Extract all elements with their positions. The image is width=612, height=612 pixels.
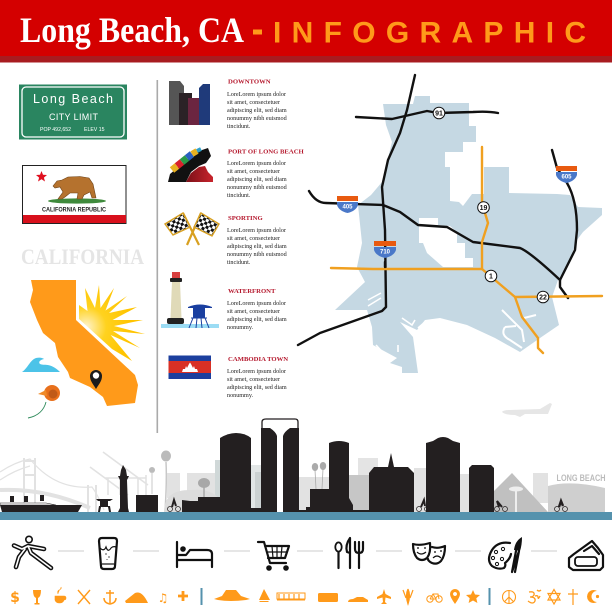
California flag [22, 166, 126, 224]
green city limit sign: ELEV 15 [84, 127, 105, 133]
text: sporting: nonummy nibh euismod [227, 252, 287, 258]
text: downtown: sit amet, consectetuer [227, 100, 280, 106]
green city limit sign [19, 84, 127, 140]
icon: map pin [450, 589, 460, 604]
row of small orange icons [10, 587, 599, 606]
icon: checkered flags [165, 213, 219, 245]
poppy flower [28, 385, 60, 418]
Long Beach road map [298, 75, 602, 373]
icon: bus [318, 593, 338, 602]
flag caption: CALIFORNIA REPUBLIC [42, 206, 106, 214]
text: sporting: adipiscing elit, sed diam [227, 244, 287, 250]
bar [200, 588, 202, 605]
sun [79, 285, 145, 361]
shield: 1: 1 [489, 274, 493, 280]
icon: om [528, 590, 541, 603]
shield: 22 [537, 291, 549, 303]
text: downtown: tincidunt. [227, 124, 251, 130]
heading: port: PORT OF LONG BEACH [228, 148, 305, 156]
white cut-outs in land [368, 218, 536, 357]
airplane [502, 403, 552, 417]
icon: runner [14, 536, 51, 568]
shield: interstate 605: 605 [561, 174, 572, 180]
location pin [90, 370, 102, 389]
heading: sporting: SPORTING [228, 215, 263, 222]
skyline [0, 419, 612, 520]
bar [488, 588, 490, 605]
text: Cambodia town: adipiscing elit, sed diam [227, 385, 287, 391]
icon: lighthouse and lifeguard tower [161, 272, 219, 328]
text: port: adipiscing elit, sed diam [227, 177, 287, 183]
vertical divider [156, 80, 158, 433]
road: route 1 [331, 268, 543, 353]
heading: Cambodia town: CAMBODIA TOWN [228, 356, 288, 363]
icon: container ship [168, 148, 213, 182]
icon: bicycle [427, 594, 442, 602]
text: waterfront: nonummy. [227, 325, 254, 331]
text: port: sit amet, consectetuer [227, 169, 280, 175]
icon: sailboat [259, 589, 270, 602]
flag bear [53, 176, 96, 199]
state shape [30, 280, 138, 406]
shield: 22: 22 [539, 294, 547, 302]
text: Cambodia town: sit amet, consectetuer [227, 377, 280, 383]
icon: bed [177, 542, 212, 567]
icon: cutlery [335, 538, 363, 568]
icon: peace [502, 590, 516, 604]
icon: beer glass [99, 538, 117, 569]
icon: music: ♫ [158, 591, 168, 605]
road: 91 freeway [356, 111, 498, 119]
background skyline gray [0, 450, 606, 512]
icon: car [348, 597, 368, 602]
separators [58, 550, 557, 552]
text: sporting: sit amet, consectetuer [227, 236, 280, 242]
text: port: LoreLorem ipsum dolor [227, 161, 286, 167]
text: waterfront: sit amet, consectetuer [227, 309, 280, 315]
icon: Cambodian flag [168, 356, 211, 379]
icon: cross [568, 589, 578, 605]
subtitle: INFOGRAPHIC [273, 16, 586, 50]
flag grass [48, 198, 106, 204]
heading: downtown: DOWNTOWN [228, 78, 271, 86]
port section [168, 148, 305, 199]
icon: anchor [104, 590, 116, 604]
shield: 19 [478, 202, 489, 213]
text: port: nonummy nibh euismod [227, 185, 287, 191]
road: 405 freeway [309, 191, 560, 280]
green city limit sign: POP 492,652 [40, 127, 71, 133]
icon: star [466, 590, 480, 603]
text: downtown: adipiscing elit, sed diam [227, 108, 287, 114]
city land area [335, 96, 602, 373]
shield: interstate 605 [556, 166, 577, 183]
dash [253, 30, 262, 34]
road: route 22 [515, 296, 602, 297]
icon: downtown buildings [169, 81, 210, 125]
text: sporting: tincidunt. [227, 260, 251, 266]
shield: 91: 91 [435, 110, 443, 118]
icon: palm [403, 589, 413, 604]
shield: 1 [485, 270, 497, 282]
icon: dollar: $ [10, 590, 20, 606]
sporting section [165, 213, 287, 266]
title: Long Beach, CA [20, 10, 244, 50]
shield: interstate 405: 405 [342, 204, 353, 210]
foreground black buildings [0, 419, 494, 512]
icon: coffee cup [55, 587, 66, 603]
text: Cambodia town: LoreLorem ipsum dolor [227, 369, 286, 375]
road redraw: 710 crossing [384, 262, 386, 267]
road: 710 freeway [298, 75, 415, 345]
icon: ferry [214, 590, 250, 601]
waterfront section [161, 272, 287, 331]
text: port: tincidunt. [227, 193, 251, 199]
ship [0, 495, 82, 512]
waterline [0, 512, 612, 520]
icon: tickets [569, 541, 603, 570]
icon: surf wave [125, 592, 148, 603]
icon: star of David [548, 590, 560, 604]
road: route 19 [482, 147, 488, 269]
text: waterfront: adipiscing elit, sed diam [227, 317, 287, 323]
green city limit sign: CITY LIMIT [49, 112, 98, 122]
icon: train [277, 593, 305, 600]
shield: 19: 19 [480, 205, 487, 212]
green city limit sign: Long Beach [33, 92, 113, 106]
icon: artist palette [489, 537, 522, 572]
text: downtown: nonummy nibh euismod [227, 116, 287, 122]
row of activity icons [14, 536, 603, 572]
road: 605 freeway [552, 150, 577, 298]
header banner [0, 0, 612, 62]
downtown section [169, 78, 287, 130]
wave [22, 358, 60, 372]
text: Cambodia town: nonummy. [227, 393, 254, 399]
shield: 91 [433, 107, 445, 119]
icon: fork and knife [78, 590, 90, 604]
California heading: CALIFORNIA [21, 244, 144, 269]
shield: interstate 710 [374, 241, 396, 258]
shield: interstate 405 [337, 196, 358, 213]
text: sporting: LoreLorem ipsum dolor [227, 228, 286, 234]
icon: crescent [587, 590, 597, 603]
cyclists [168, 500, 568, 512]
flag star [36, 171, 47, 182]
text: downtown: LoreLorem ipsum dolor [227, 92, 286, 98]
lifeguard tower silhouette [96, 499, 113, 512]
icon: wine glass [33, 590, 41, 604]
California map with decorations [22, 280, 145, 418]
icon: shopping cart [258, 542, 289, 571]
shield: interstate 710: 710 [380, 250, 391, 256]
icon: airplane [377, 589, 391, 604]
heading: waterfront: WATERFRONT [228, 288, 276, 295]
icon: plus [178, 591, 188, 601]
icon: crescent star [596, 595, 599, 598]
Cambodia town section [168, 356, 288, 399]
icon: theater masks [413, 543, 445, 564]
text: waterfront: LoreLorem ipsum dolor [227, 301, 286, 307]
